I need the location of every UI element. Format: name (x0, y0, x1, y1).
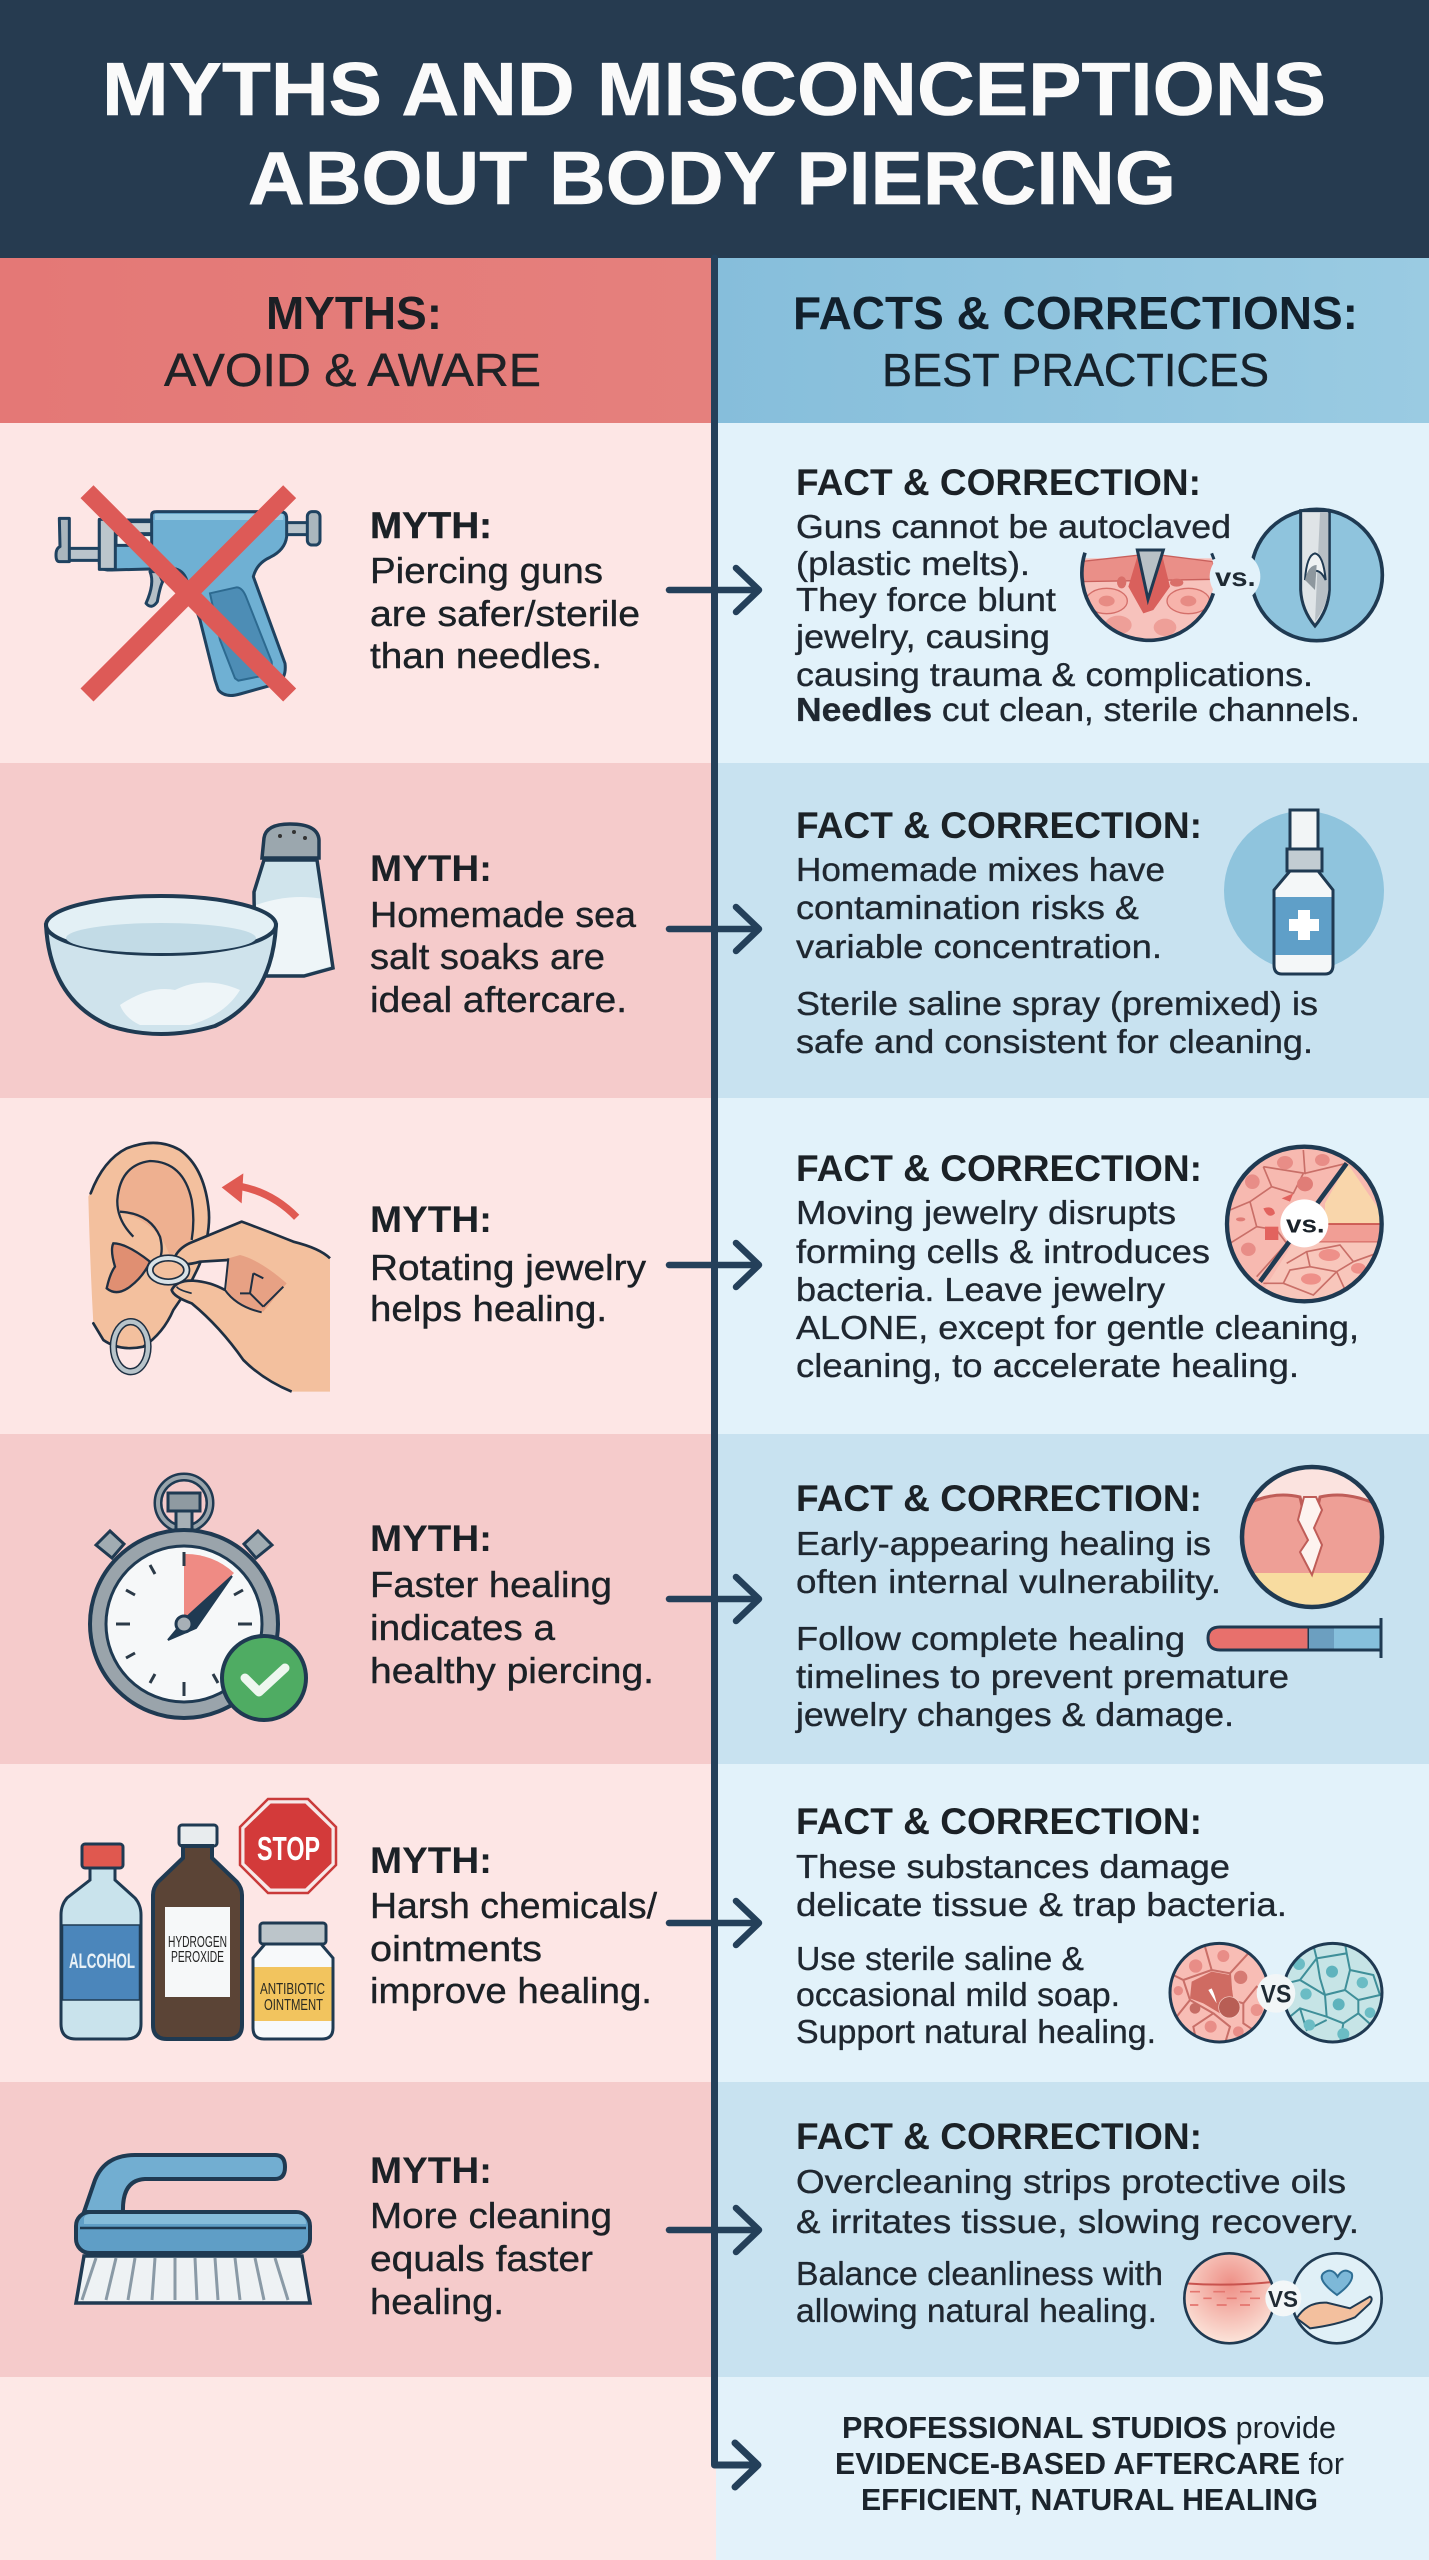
icon: irritated skin vs gentle care: VS (1268, 2286, 1298, 2312)
jar: antibiotic ointment: OINTMENT (264, 1997, 323, 2014)
text: fact 1: FACT & CORRECTION: (796, 462, 1201, 503)
text: fact 5: occasional mild soap. (796, 1977, 1120, 2014)
stop sign: STOP (257, 1830, 320, 1867)
text: fact 5 (796, 1801, 1287, 2051)
text: myth 1: MYTH: (370, 505, 492, 546)
text: myth 6: More cleaning (370, 2195, 612, 2236)
text: fact 5: Support natural healing. (796, 2014, 1156, 2051)
jar: antibiotic ointment: ANTIBIOTIC (260, 1981, 325, 1998)
text: fact 1: (plastic melts). (796, 546, 1030, 583)
text: fact 4 (795, 1478, 1289, 1734)
header: facts column (712, 258, 1429, 423)
text: myth 4: MYTH: (370, 1518, 492, 1559)
text: myth 4 (370, 1518, 654, 1691)
text: fact 2: contamination risks & (796, 890, 1139, 927)
text: myth 6: MYTH: (370, 2150, 492, 2191)
text: fact 2: safe and consistent for cleaning. (796, 1024, 1313, 1061)
icon: irritated skin vs gentle care (1183, 2252, 1382, 2345)
header: facts column: FACTS & CORRECTIONS: (793, 287, 1358, 339)
text: fact 6: FACT & CORRECTION: (796, 2116, 1202, 2157)
icon: disrupted vs healthy cells: vs. (1286, 1211, 1325, 1238)
text: fact 5: delicate tissue & trap bacteria. (796, 1887, 1287, 1924)
text: fact 6: allowing natural healing. (796, 2293, 1157, 2330)
header: myths column: AVOID & AWARE (164, 344, 541, 396)
text: myth 1 (370, 505, 640, 676)
jar: antibiotic ointment (253, 1923, 333, 2039)
text: fact 2: variable concentration. (796, 929, 1162, 966)
text: fact 1 (795, 462, 1360, 729)
text: fact 4: often internal vulnerability. (796, 1564, 1221, 1601)
text: myth 3 (370, 1199, 646, 1329)
central divider line and final arrow (714, 258, 758, 2487)
text: myth 5: improve healing. (370, 1970, 652, 2011)
text: myth 6 (370, 2150, 612, 2322)
text: footer conclusion: PROFESSIONAL STUDIOS provide (842, 2410, 1336, 2445)
text: fact 5: FACT & CORRECTION: (796, 1801, 1202, 1842)
text: fact 3: forming cells & introduces (796, 1234, 1210, 1271)
text: myth 3: Rotating jewelry (370, 1247, 646, 1288)
text: fact 2: Sterile saline spray (premixed) is (796, 986, 1318, 1023)
icon: bowl and salt shaker (46, 824, 333, 1034)
text: fact 3: bacteria. Leave jewelry (796, 1272, 1165, 1309)
text: fact 6 (796, 2116, 1359, 2330)
header: myths column: MYTHS: (266, 287, 442, 339)
icon: damaged vs healthy tissue cells: VS (1261, 1981, 1291, 2008)
text: myth 1: Piercing guns (370, 550, 603, 591)
bottle: alcohol: ALCOHOL (69, 1950, 135, 1973)
text: fact 4: jewelry changes & damage. (795, 1697, 1234, 1734)
bottle: alcohol (61, 1844, 141, 2039)
icon: ear with hand rotating jewelry (88, 1143, 330, 1392)
text: myth 5: Harsh chemicals/ (370, 1885, 657, 1926)
text: fact 1: Needles cut clean, sterile channels. (796, 692, 1360, 729)
text: fact 2: Homemade mixes have (796, 852, 1165, 889)
arrow: row 4 (669, 1577, 759, 1621)
text: myth 4: Faster healing (370, 1564, 612, 1605)
icon: sterile saline spray (1224, 810, 1384, 974)
text: myth 1: are safer/sterile (370, 593, 640, 634)
text: fact 3: FACT & CORRECTION: (796, 1148, 1202, 1189)
text: myth 4: indicates a (370, 1607, 556, 1648)
bottle: hydrogen peroxide: PEROXIDE (171, 1949, 224, 1966)
text: fact 3: ALONE, except for gentle cleaning, (796, 1310, 1359, 1347)
arrow: row 1 (669, 568, 759, 612)
text: fact 1: They force blunt (796, 582, 1057, 619)
icon: stopwatch with check (90, 1477, 306, 1720)
text: fact 1: causing trauma & complications. (796, 657, 1313, 694)
text: fact 6: & irritates tissue, slowing recovery. (796, 2204, 1359, 2241)
bottle: hydrogen peroxide (153, 1825, 242, 2039)
icon: harsh chemicals and stop sign (61, 1799, 336, 2039)
text: fact 5: These substances damage (796, 1849, 1230, 1886)
text: fact 2: FACT & CORRECTION: (796, 805, 1202, 846)
text: fact 4: FACT & CORRECTION: (796, 1478, 1202, 1519)
icon: gun trauma vs needle: vs. (1215, 562, 1256, 592)
title banner: ABOUT BODY PIERCING (248, 136, 1176, 220)
stop sign (240, 1799, 336, 1893)
title banner: MYTHS AND MISCONCEPTIONS (102, 47, 1326, 131)
header: myths column (0, 258, 712, 423)
text: myth 3: helps healing. (370, 1288, 607, 1329)
arrow: row 5 (669, 1901, 759, 1945)
header: facts column: BEST PRACTICES (882, 344, 1269, 396)
icon: scrub brush (76, 2155, 310, 2303)
text: myth 2: salt soaks are (370, 936, 605, 977)
icon: healing timeline bar (1208, 1618, 1382, 1658)
text: fact 3: cleaning, to accelerate healing. (796, 1348, 1299, 1385)
icon: damaged vs healthy tissue cells (1168, 1942, 1385, 2045)
text: fact 1: jewelry, causing (795, 619, 1050, 656)
arrow: row 6 (669, 2208, 759, 2252)
text: fact 3: Moving jewelry disrupts (796, 1195, 1176, 1232)
text: myth 5 (370, 1840, 657, 2011)
text: footer conclusion: EVIDENCE-BASED AFTERCARE for (835, 2446, 1344, 2481)
icon: disrupted vs healthy cells (1223, 1143, 1390, 1307)
text: fact 5: Use sterile saline & (796, 1941, 1084, 1978)
text: myth 3: MYTH: (370, 1199, 492, 1240)
text: footer conclusion: EFFICIENT, NATURAL HEALING (861, 2482, 1318, 2517)
text: myth 2: MYTH: (370, 848, 492, 889)
text: myth 2 (370, 848, 637, 1020)
text: myth 4: healthy piercing. (370, 1650, 654, 1691)
icon: tissue crack (1240, 1465, 1384, 1609)
text: fact 6: Balance cleanliness with (796, 2256, 1163, 2293)
bottle: hydrogen peroxide: HYDROGEN (168, 1934, 227, 1951)
arrow: row 3 (669, 1243, 759, 1287)
text: myth 6: healing. (370, 2281, 504, 2322)
text: fact 4: timelines to prevent premature (796, 1659, 1289, 1696)
text: myth 6: equals faster (370, 2238, 593, 2279)
text: myth 5: MYTH: (370, 1840, 492, 1881)
arrow: row 2 (669, 907, 759, 951)
text: fact 1: Guns cannot be autoclaved (796, 509, 1231, 546)
text: fact 4: Follow complete healing (796, 1621, 1185, 1658)
text: myth 1: than needles. (370, 635, 602, 676)
text: fact 4: Early-appearing healing is (796, 1526, 1211, 1563)
text: myth 2: Homemade sea (370, 894, 637, 935)
text: fact 2 (796, 805, 1318, 1061)
text: myth 5: ointments (370, 1928, 542, 1969)
text: fact 3 (796, 1148, 1359, 1385)
title banner (0, 0, 1429, 258)
text: fact 6: Overcleaning strips protective oils (796, 2164, 1346, 2201)
icon: gun trauma vs needle (1077, 509, 1382, 645)
text: footer conclusion (835, 2410, 1344, 2517)
icon: piercing gun crossed out (56, 492, 320, 695)
text: myth 2: ideal aftercare. (370, 979, 627, 1020)
